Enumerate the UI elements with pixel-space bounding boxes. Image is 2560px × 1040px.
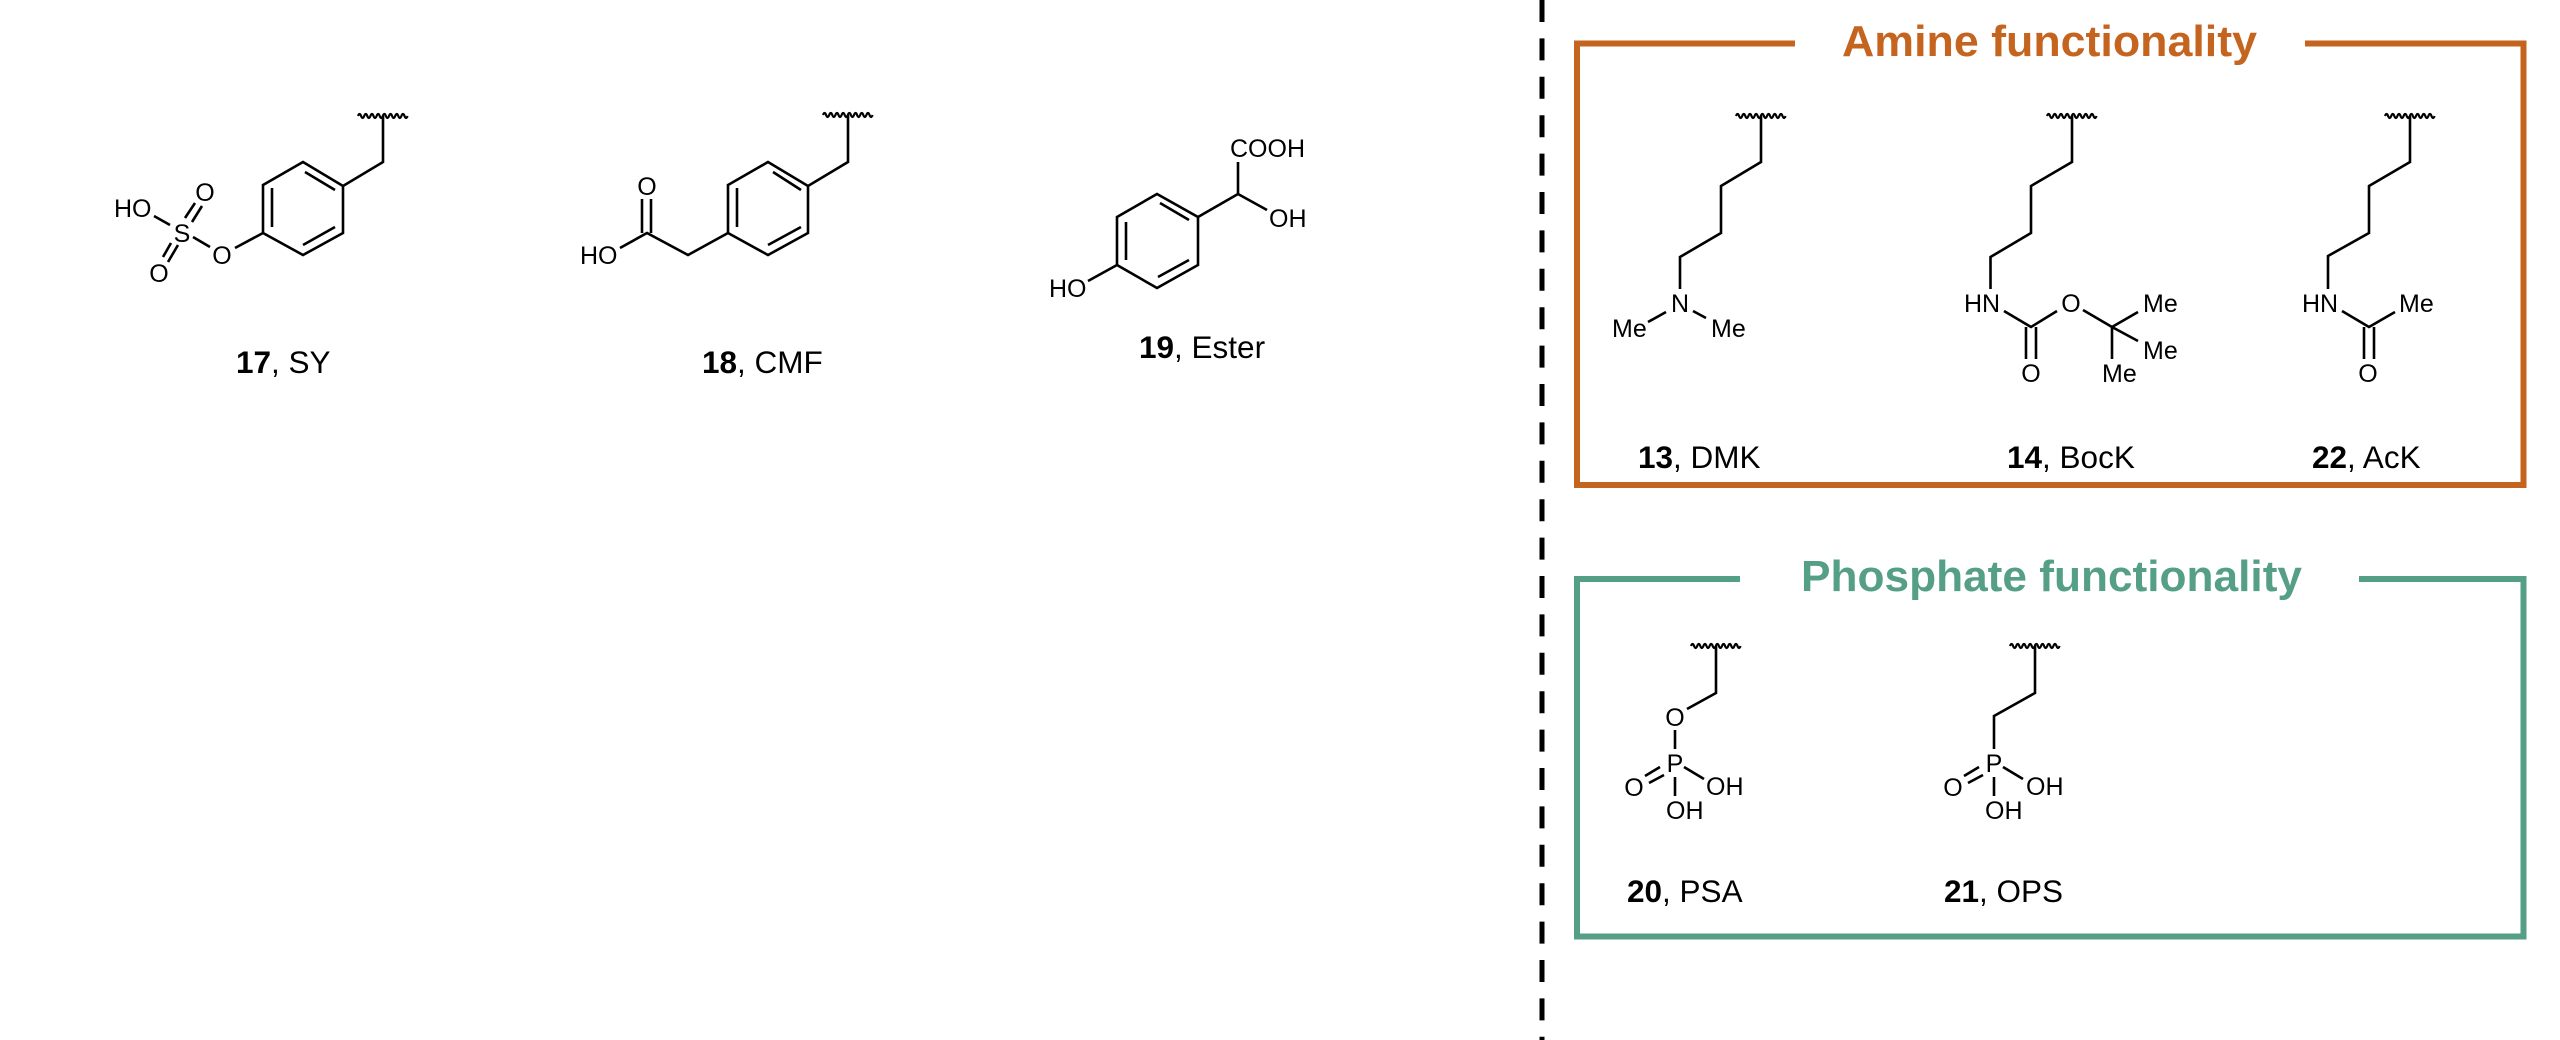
- structure 20 PSA: O: [1665, 704, 1685, 732]
- heading: amine functionality: Amine functionality: [1842, 17, 2258, 66]
- structure 17 SY: O: [212, 242, 232, 270]
- structure 14 BocK: O: [2021, 360, 2041, 388]
- structure 19 Ester: COOH: [1230, 135, 1305, 163]
- structure 20 PSA: [1624, 644, 1744, 909]
- structure 22 AcK: Me: [2399, 290, 2434, 318]
- structure 14 BocK: Me: [2143, 290, 2178, 318]
- structure 19 Ester: [1049, 135, 1306, 365]
- structure 19 Ester: HO: [1049, 275, 1086, 303]
- structure 14 BocK: Me: [2143, 337, 2178, 365]
- structure 20 PSA: OH: [1666, 797, 1704, 825]
- structure 13 DMK: Me: [1612, 315, 1647, 343]
- structure 18 CMF: O: [637, 173, 657, 201]
- structure 19 Ester: OH: [1269, 205, 1306, 233]
- structure 20 PSA: P: [1667, 750, 1683, 778]
- label: 13, DMK: 13, DMK: [1638, 439, 1761, 475]
- label: 19, Ester: 19, Ester: [1139, 329, 1265, 365]
- structure 18 CMF: [580, 113, 873, 380]
- structure 21 OPS: OH: [1985, 797, 2022, 825]
- label: 14, BocK: 14, BocK: [2007, 439, 2135, 475]
- label: 20, PSA: 20, PSA: [1627, 873, 1743, 909]
- label: 17, SY: 17, SY: [236, 344, 331, 380]
- structure 22 AcK: O: [2358, 360, 2378, 388]
- structure 21 OPS: OH: [2026, 773, 2064, 801]
- structure 22 AcK: HN: [2302, 290, 2338, 318]
- structure 13 DMK: [1612, 114, 1786, 475]
- structure 17 SY: O: [149, 260, 169, 288]
- structure 18 CMF: HO: [580, 242, 618, 270]
- structure 13 DMK: N: [1671, 290, 1689, 318]
- structure 17 SY: HO: [114, 195, 152, 223]
- structure 14 BocK: HN: [1964, 290, 2000, 318]
- structure 21 OPS: O: [1943, 774, 1963, 802]
- heading: phosphate functionality: Phosphate functionality: [1801, 552, 2303, 601]
- structure 21 OPS: [1943, 644, 2064, 909]
- structure 17 SY: S: [174, 220, 190, 248]
- label: 18, CMF: 18, CMF: [702, 344, 823, 380]
- structure 21 OPS: P: [1986, 750, 2002, 778]
- structure 14 BocK: O: [2061, 290, 2081, 318]
- structure 20 PSA: O: [1624, 774, 1644, 802]
- structure 14 BocK: [1964, 114, 2178, 475]
- structure 17 SY: O: [195, 179, 215, 207]
- structure 22 AcK: [2302, 114, 2435, 475]
- label: 21, OPS: 21, OPS: [1944, 873, 2063, 909]
- structure 17 SY: [114, 114, 408, 380]
- dashed vertical divider: [1540, 0, 1544, 1040]
- panel: phosphate functionality: [1577, 552, 2524, 936]
- label: 22, AcK: 22, AcK: [2312, 439, 2421, 475]
- structure 20 PSA: OH: [1706, 773, 1744, 801]
- panel: amine functionality: [1577, 17, 2524, 485]
- structure 14 BocK: Me: [2102, 360, 2137, 388]
- structure 13 DMK: Me: [1711, 315, 1746, 343]
